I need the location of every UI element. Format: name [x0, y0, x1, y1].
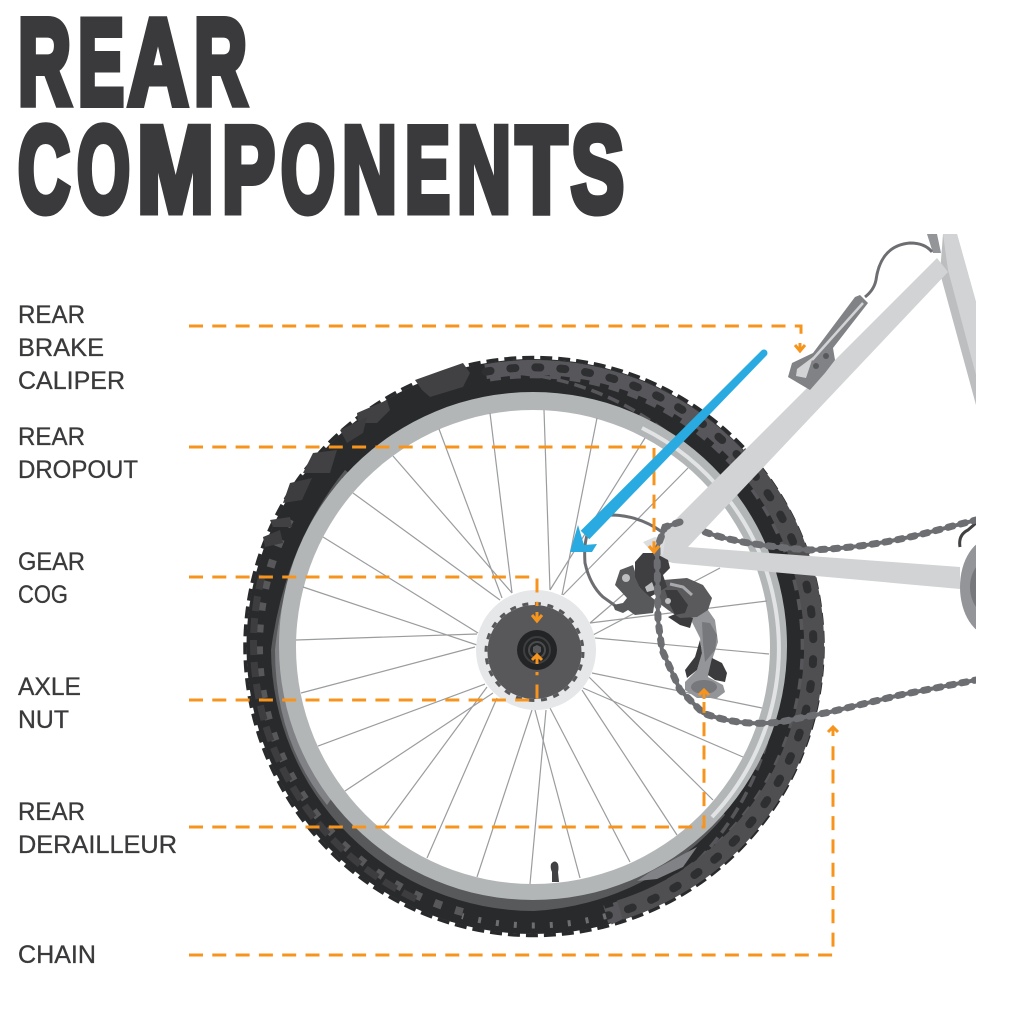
- title: C: [18, 102, 70, 238]
- hub: [476, 590, 596, 710]
- derailleur cable: [585, 515, 662, 607]
- label: chain: CHAIN: [18, 941, 96, 969]
- title: N: [457, 102, 511, 238]
- label: gear cog: COG: [18, 581, 68, 609]
- label: rear derailleur: DERAILLEUR: [18, 831, 177, 859]
- rear brake caliper: [788, 295, 868, 390]
- lower chain: [657, 522, 976, 723]
- title: E: [405, 102, 450, 238]
- valve stem: [551, 862, 559, 882]
- title: [18, 0, 624, 238]
- brake cable: [865, 243, 932, 297]
- upper chain: [705, 520, 976, 550]
- leader: rear derailleur: [189, 690, 709, 827]
- seat tube: [927, 234, 976, 405]
- label: axle nut: [18, 673, 81, 734]
- wheel tire: [245, 358, 823, 936]
- leader: chain: [189, 727, 838, 955]
- title: O: [77, 102, 130, 238]
- label: rear brake caliper: REAR: [18, 301, 85, 329]
- wheel rim: [279, 392, 787, 900]
- rim shadow bands: [271, 470, 725, 911]
- title: M: [137, 102, 214, 238]
- title: T: [516, 102, 567, 238]
- leader: rear dropout: [189, 447, 659, 552]
- title: P: [222, 102, 275, 238]
- rear cog and frame, clipped group: [651, 234, 976, 630]
- title: S: [571, 102, 624, 238]
- label: rear brake caliper: CALIPER: [18, 367, 125, 395]
- leader: rear brake caliper: [189, 326, 805, 351]
- label: rear dropout: REAR: [18, 423, 85, 451]
- label: rear brake caliper: BRAKE: [18, 334, 104, 362]
- seat stay and chain stay: [648, 258, 960, 589]
- spokes: [296, 410, 769, 884]
- blue arrow: [570, 350, 768, 552]
- label: gear cog: GEAR: [18, 548, 85, 576]
- leader: axle nut: [189, 655, 542, 700]
- leader: gear cog: [189, 577, 542, 621]
- title: N: [342, 102, 397, 238]
- label: axle nut: NUT: [18, 706, 69, 734]
- label: gear cog: [18, 548, 85, 609]
- label: axle nut: AXLE: [18, 673, 81, 701]
- label: rear dropout: [18, 423, 138, 484]
- rear derailleur: [613, 537, 727, 698]
- title: O: [281, 102, 335, 238]
- label: rear brake caliper: [18, 301, 125, 395]
- label: rear derailleur: REAR: [18, 798, 85, 826]
- front-side cassette: [958, 524, 976, 630]
- label: rear dropout: DROPOUT: [18, 456, 138, 484]
- label: rear derailleur: [18, 798, 177, 859]
